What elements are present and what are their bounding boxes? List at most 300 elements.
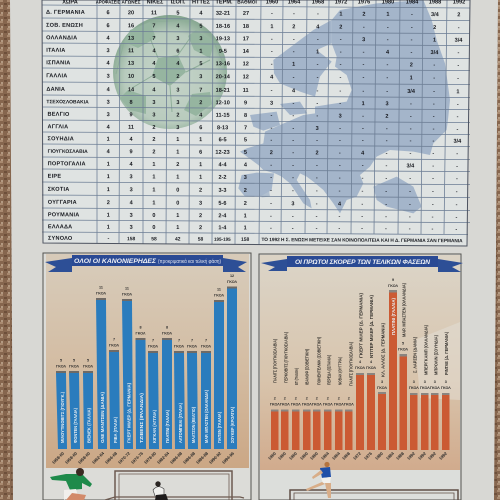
row: Netherlands: 4 [107, 36, 110, 42]
bar: 3 goals: ΜΠΡΟΛΙΝ (ΣΟΥΗΔΙΑ) [434, 335, 438, 375]
bar: 5 goals: ΜΑΡ. ΜΠΑΣΤΕΝ (ΟΛΛΑΝΔΙΑ) [402, 283, 406, 337]
bar: 7 goals: 7 [178, 338, 180, 342]
row: Scotland: - [292, 188, 294, 194]
row: Netherlands: - [271, 37, 273, 43]
row: Denmark: 4 [152, 87, 156, 93]
row: Scotland: 1 [107, 187, 110, 193]
row: Ireland: ΕΙΡΕ [48, 174, 61, 180]
row: Ireland: - [432, 176, 434, 182]
row: England: 3 [316, 126, 319, 132]
bar: 3 goals: ΓΚΟΛ [409, 386, 419, 390]
row: Netherlands: 7 [152, 36, 156, 42]
row: Romania: 0 [152, 213, 155, 219]
row: West Germany: 2 [362, 12, 365, 18]
row: Belgium: - [410, 114, 412, 120]
bar: 4 goals: ΓΚΕΡΤ ΜΙΛΕΡ (Δ. ΓΕΡΜΑΝΙΑ) [358, 293, 364, 358]
row: Romania: 3 [130, 213, 133, 219]
row: Spain: - [271, 62, 273, 68]
row: West Germany: 5 [176, 11, 180, 17]
row: Scotland [48, 187, 458, 195]
bar: 5 goals: ΓΚΟΛ [69, 364, 80, 368]
row: Ireland: 1 [107, 174, 110, 180]
row: Ireland: - [292, 175, 294, 181]
bar: 2 goals: ΓΚΟΛ [334, 402, 344, 406]
row: Portugal: 1 [152, 162, 156, 168]
bar: 2 goals [299, 349, 312, 461]
row: Italy: 6 [176, 49, 179, 55]
row: West Germany: Δ. ΓΕΡΜΑΝΙΑ [46, 10, 85, 16]
row: Ireland: - [316, 175, 318, 181]
row: Greece: - [455, 227, 457, 233]
row: Italy: 11 [128, 48, 134, 54]
row: Portugal: 3/4 [406, 163, 415, 169]
row: Czechoslovakia: 3 [176, 100, 179, 106]
row: Hungary: 4 [338, 201, 342, 208]
row: Portugal: - [362, 163, 364, 169]
row: Soviet Union: 18-16 [216, 24, 230, 30]
bar: 3 goals: ΜΠΕΡΓΚΑΜΠ (ΟΛΛΑΝΔΙΑ) [424, 325, 428, 375]
row: Netherlands: - [317, 37, 319, 43]
row: Spain: - [317, 62, 319, 68]
row: France: - [340, 75, 342, 81]
row: Sweden: - [292, 138, 294, 144]
row: Belgium: 4 [199, 113, 203, 119]
row: Hungary: - [270, 201, 272, 207]
row: Spain [46, 60, 459, 69]
row: England: - [457, 127, 459, 133]
row: Italy: 1 [199, 49, 202, 55]
row: Spain: - [433, 63, 435, 69]
row: Soviet Union: 16 [128, 23, 134, 29]
row: West Germany: 20 [128, 10, 134, 16]
bar: 11 goals: ΓΚΟΛ [96, 292, 107, 296]
row: Sweden: ΣΟΥΗΔΙΑ [48, 136, 74, 142]
row: Hungary: 3 [199, 201, 202, 207]
row: West Germany: 4 [199, 11, 203, 17]
bar: 7 goals: ΓΚΟΛ [109, 344, 120, 348]
row: Sweden [48, 136, 462, 145]
row: France [46, 73, 459, 82]
bar: 5 goals: 1958-60 [64, 450, 79, 465]
row: France: - [362, 75, 364, 81]
row: Belgium [47, 112, 459, 120]
row: England: - [386, 126, 388, 132]
row: Sweden: - [386, 138, 388, 144]
row: Hungary: 0 [176, 200, 179, 207]
row: Hungary [48, 200, 458, 208]
row: Greece: - [292, 226, 294, 232]
table: qualifying results by country [42, 0, 470, 246]
row: France: 5 [152, 74, 156, 80]
bar: 2 goals [331, 357, 344, 461]
row: Hungary: 2 [107, 200, 110, 206]
row: Romania [48, 212, 457, 221]
row: England: 11 [128, 125, 134, 131]
row: Sweden: 2 [152, 137, 156, 143]
row: Hungary: 1 [152, 200, 156, 206]
bar: 2 goals: 2 [306, 396, 308, 400]
row: Romania: - [361, 214, 363, 220]
row: Yugoslavia: - [410, 151, 412, 157]
row: total and note: 58 [198, 237, 204, 243]
bar: 4 goals: 4 [359, 360, 362, 364]
row: Hungary: - [385, 202, 387, 208]
bar: 5 goals: 1958-60 [77, 450, 92, 465]
row: Spain: - [363, 62, 365, 68]
bar: 5 goals: ΜΙΛΟΥΤΙΝΟΒΙΤΣ (ΓΙΟΥΓΚ.) [60, 392, 65, 443]
bar: 12 goals: 12 [230, 274, 234, 278]
row: Yugoslavia: - [432, 151, 434, 157]
bar: 7 goals: ΡΙΒΑ (ΙΤΑΛΙΑ) [113, 417, 118, 443]
row: England: - [292, 126, 294, 132]
bar: 2 goals: ΓΙΑΛΙΤΣ (ΓΙΟΥΓΚΟΣΛΑΒΙΑ) [348, 342, 354, 386]
bar: 2 goals: ΝΟΒΑΚ (ΟΥΓΓΡΙΑ) [338, 357, 342, 385]
row: Czechoslovakia: 3 [270, 101, 273, 107]
row: total and note [48, 236, 463, 244]
bar: 7 goals: 1986-88 [195, 450, 210, 465]
row: Scotland: - [432, 189, 434, 195]
row: Greece: - [316, 226, 318, 232]
bar: 3 goals: 1992 [406, 450, 416, 461]
row: Portugal [48, 161, 458, 170]
row: France: ΓΑΛΛΙΑ [46, 73, 68, 79]
bar: 2 goals: ΓΚΟΛ [302, 402, 312, 406]
bar: 2 goals: ΠΕΡΕΔΑ (ΙΣΠΑΝΙΑ) [326, 355, 332, 385]
row: Soviet Union: - [458, 25, 460, 31]
table header row: ΒΑΘΜΟΙ [237, 0, 257, 5]
row: Scotland: 1 [152, 187, 155, 193]
row: France: 20-14 [216, 74, 231, 80]
row: Czechoslovakia: 1 [362, 101, 365, 107]
bar: 7 goals [143, 338, 159, 465]
row: Yugoslavia: 9 [130, 149, 133, 155]
row: England: - [433, 127, 435, 133]
bar: 5 goals: 5 [402, 342, 404, 346]
row: Sweden: - [316, 138, 318, 144]
row: Denmark: 4 [107, 87, 111, 93]
row: Romania: ΡΟΥΜΑΝΙΑ [48, 212, 80, 218]
bar: 5 goals: ΓΚΟΛ [83, 364, 94, 368]
row: Spain: 13 [128, 61, 134, 67]
bar: 2 goals: 1960 [288, 450, 298, 461]
row: West Germany: 6 [106, 10, 110, 16]
row: Czechoslovakia: - [457, 102, 459, 108]
row: Spain: 1 [292, 62, 295, 68]
bar: 11 goals [208, 288, 225, 465]
bar: 2 goals [309, 337, 322, 461]
row: Hungary: 4 [130, 200, 134, 206]
row: Yugoslavia: - [292, 150, 294, 156]
bar: 3 goals: 1980 [374, 450, 384, 461]
row: Italy: 14 [243, 49, 250, 55]
row: Scotland: 3-3 [218, 188, 226, 194]
bar: 11 goals: 1970-72 [117, 450, 132, 465]
bar: 2 goals: 2 [284, 396, 286, 400]
row: Spain: 13-16 [216, 61, 230, 67]
row: France: - [457, 76, 459, 82]
row: Spain: - [340, 62, 342, 68]
bar: 2 goals [288, 368, 301, 461]
row: Hungary: 2 [244, 201, 247, 207]
bar: 8 goals [130, 326, 146, 465]
bar: 3 goals: 3 [413, 380, 415, 384]
row: Czechoslovakia: - [433, 102, 435, 108]
row: Sweden: - [410, 138, 412, 144]
row: total and note: 58 [151, 236, 157, 242]
bar: 3 goals: 1992 [438, 450, 448, 461]
bar: 7 goals: 7 [113, 338, 115, 342]
row: Netherlands: 19-13 [216, 36, 230, 42]
goal illustration right [290, 490, 458, 500]
banner: left heading: (προκριματικά και τελική φάση) [158, 258, 221, 265]
row: Portugal: - [339, 163, 341, 169]
bar: 4 goals: ΝΤΙΤΕΡ ΜΙΛΕΡ (Δ. ΓΕΡΜΑΝΙΑ) [369, 295, 374, 358]
row: Sweden: - [270, 138, 272, 144]
row: Portugal: 4 [130, 162, 134, 168]
row: Czechoslovakia: - [339, 101, 341, 107]
row: Romania: 2-4 [218, 213, 227, 219]
bar: 3 goals [417, 325, 430, 461]
row: France: 4 [270, 75, 274, 81]
bar: 3 goals [406, 337, 419, 461]
row: Romania: - [432, 215, 434, 221]
row: Yugoslavia: ΓΙΟΥΓΚΟΣΛΑΒΙΑ [48, 149, 88, 155]
row: Hungary: 5-6 [218, 201, 226, 207]
row: Greece: 1 [107, 225, 110, 231]
row: Italy: - [293, 49, 295, 55]
row: Yugoslavia [48, 149, 458, 157]
row: France: 3 [107, 74, 110, 80]
bar: 5 goals [395, 283, 409, 461]
row: Denmark: 3/4 [407, 89, 416, 95]
row: Scotland: - [361, 189, 363, 195]
row: Romania: - [409, 214, 411, 220]
row: Romania: - [455, 215, 457, 221]
bar: 2 goals: 2 [327, 396, 329, 400]
row: Scotland: 2 [199, 188, 202, 194]
panel: all-time qualifying top scorers [43, 253, 251, 500]
soccer ball watermark [113, 15, 227, 129]
bar: 7 goals: ΜΑΡ. ΜΠΑΣΤΕΝ (ΟΛΛΑΝΔΙΑ) [204, 390, 209, 443]
row: Belgium: - [292, 113, 294, 119]
row: Portugal: - [386, 163, 388, 169]
row: Spain: - [457, 63, 459, 69]
row: Greece: - [361, 226, 363, 232]
row: Romania: - [385, 214, 387, 220]
row: Soviet Union [46, 23, 460, 31]
row: France: - [386, 75, 388, 81]
row: total and note: 158 [127, 236, 136, 242]
row: Soviet Union: 4 [176, 24, 180, 30]
bar: 11 goals: ΓΚΟΛ [122, 292, 133, 296]
row: Belgium: ΒΕΛΓΙΟ [47, 112, 70, 118]
row: Portugal: 1 [107, 162, 110, 168]
bar: 2 goals: ΙΒΑΝΟΦ (ΣΟΒΙΕΤΙΚΗ) [304, 349, 310, 385]
bar: 3 goals: 3 [445, 380, 447, 384]
row: Yugoslavia: 4 [107, 149, 111, 155]
row: West Germany: 1 [386, 12, 389, 18]
bar: 8 goals: ΠΛΑΤΙΝΙ (ΓΑΛΛΙΑ) [165, 410, 170, 443]
bar: 2 goals: 1960 [267, 450, 277, 461]
bar: 9 goals: 1984 [385, 450, 395, 461]
bar: 2 goals: ΓΚΟΛ [323, 402, 333, 406]
row: Denmark: 11 [243, 88, 249, 94]
row: West Germany [46, 10, 460, 18]
row: West Germany: 2 [457, 12, 460, 18]
bar: 3 goals: 3 [434, 380, 436, 384]
bar: 7 goals: 1966-68 [104, 450, 119, 465]
bar: 3 goals: ΓΚΟΛ [377, 386, 388, 390]
row: West Germany: 1 [339, 11, 342, 18]
row: Ireland: - [385, 176, 387, 182]
row: Denmark: 14 [128, 87, 135, 93]
row: Hungary: - [316, 201, 318, 207]
row: Greece [48, 224, 457, 233]
row: Denmark: - [433, 89, 435, 95]
bar: 7 goals: ΑΛΤΟΜΠΕΛΙ (ΙΤΑΛΙΑ) [178, 403, 183, 443]
row: Netherlands: ΟΛΛΑΝΔΙΑ [46, 35, 77, 41]
bar: 11 goals: ΓΚΕΡΤ ΜΙΛΕΡ (Δ. ΓΕΡΜΑΝΙΑ) [126, 383, 132, 443]
row: Denmark: ΔΑΝΙΑ [46, 87, 65, 93]
row: Yugoslavia: 6 [199, 150, 202, 156]
row: West Germany: - [317, 11, 319, 17]
row: Romania: - [338, 214, 340, 220]
row: Netherlands: - [340, 37, 342, 43]
row: Belgium: - [433, 114, 435, 120]
row: Denmark: - [316, 88, 318, 94]
bar: 11 goals: ΟΛΕ ΜΑΝΤΣΕΝ (ΔΑΝΙΑ) [100, 392, 105, 443]
row: Italy: 9-5 [219, 49, 227, 55]
row: Netherlands: - [411, 37, 413, 43]
row: Portugal: ΠΟΡΤΟΓΑΛΙΑ [48, 161, 86, 167]
row: Czechoslovakia: 9 [244, 100, 247, 106]
bar: 2 goals: 2 [274, 396, 276, 400]
row: Denmark: - [362, 89, 364, 95]
bar: 11 goals: ΠΑΠΕΝ (ΓΑΛΛΙΑ) [217, 412, 222, 443]
row: Scotland: ΣΚΟΤΙΑ [48, 187, 70, 193]
row: Denmark: - [271, 88, 273, 94]
row: Sweden: 1 [199, 137, 202, 143]
row: Belgium: 3 [152, 112, 156, 118]
row: West Germany: 3/4 [431, 12, 440, 18]
row: Italy: - [411, 50, 413, 56]
row: Netherlands: 3/4 [455, 38, 463, 44]
row: Portugal: - [432, 164, 434, 170]
row: total and note: - [107, 236, 109, 242]
row: England: 3 [176, 125, 179, 131]
row: Spain: 5 [199, 61, 202, 67]
bar: 2 goals: ΓΚΟΛ [291, 402, 301, 406]
bar: 5 goals [64, 358, 80, 465]
bar: 3 goals: Σ. ΛΑΡΣΕΝ (ΔΑΝΙΑ) [412, 337, 418, 373]
bar: 11 goals: 11 [125, 286, 129, 290]
row: Soviet Union: 1 [270, 24, 273, 30]
row: Soviet Union: 4 [316, 24, 320, 30]
bar: 7 goals: 7 [205, 338, 207, 342]
bar: 7 goals [195, 338, 212, 465]
banner: right heading [261, 256, 463, 272]
bar: 2 goals: ΓΕΡΚΟΒΙΤΣ (ΓΙΟΥΓΚΟΣΛΑΒΙΑ) [284, 332, 288, 383]
row: Netherlands: 17 [243, 36, 249, 42]
bar: 4 goals: 1972 [352, 450, 362, 461]
row: Belgium: - [457, 114, 459, 120]
row: Netherlands: 3 [176, 36, 180, 42]
bar: 3 goals [374, 323, 388, 461]
row: Soviet Union: 7 [152, 23, 156, 29]
row: Spain: ΙΣΠΑΝΙΑ [46, 60, 71, 66]
row: Belgium: 3 [107, 112, 110, 118]
row: Romania: 1 [107, 213, 110, 219]
row: Italy: 1 [316, 49, 319, 55]
row: Sweden: - [339, 138, 341, 144]
row: Scotland: 2 [244, 188, 247, 194]
bar: 5 goals: 1988 [395, 450, 405, 461]
row: Portugal: 2 [176, 162, 179, 168]
panel: top scorers of final tournaments [259, 254, 463, 500]
row: Yugoslavia: 12-23 [215, 150, 230, 156]
row: France: 3 [199, 74, 202, 80]
row: England: - [339, 126, 341, 132]
row: total and note: 42 [175, 236, 181, 243]
row: Belgium: 2 [176, 112, 179, 119]
bar: 7 goals: 1986-88 [182, 450, 197, 465]
row: Yugoslavia: - [456, 151, 458, 157]
bar: 7 goals [182, 338, 198, 465]
row: Denmark: - [386, 89, 388, 95]
row: Italy: - [457, 50, 459, 56]
bar: 5 goals [51, 358, 67, 465]
row: Sweden: 1 [107, 137, 110, 143]
row: Czechoslovakia: 12-10 [216, 100, 230, 106]
row: Netherlands: - [293, 37, 295, 43]
bar: 2 goals [320, 355, 333, 461]
bar: 9 goals: ΠΛΑΤΙΝΙ (ΓΑΛΛΙΑ) [391, 298, 396, 335]
bar: 11 goals: 1962-64 [91, 450, 106, 465]
bar: 11 goals: 11 [217, 288, 221, 292]
row: Sweden: 4 [130, 137, 134, 143]
row: Greece: 2 [199, 225, 202, 231]
row: Czechoslovakia: 2 [199, 100, 202, 106]
icon: player in blue [306, 462, 331, 498]
bar: 11 goals [117, 286, 133, 465]
row: Greece: - [385, 226, 387, 232]
row: West Germany: 27 [243, 11, 249, 17]
row: total and note: 158 [241, 237, 249, 243]
row: Hungary: - [456, 202, 458, 208]
row: Greece: - [432, 227, 434, 233]
bar: 5 goals: ΓΚΟΛ [398, 348, 409, 352]
bar: 5 goals: 1958-60 [51, 450, 66, 465]
row: Sweden: 3/4 [453, 139, 462, 145]
row: Spain: 4 [176, 61, 180, 67]
row: West Germany: - [411, 12, 413, 18]
row: Soviet Union: 2 [292, 24, 295, 30]
row: Hungary: - [432, 202, 434, 208]
row: Scotland: 3 [130, 187, 133, 193]
row: Portugal: 4 [244, 162, 248, 168]
row: Sweden: - [433, 139, 435, 145]
bar: 7 goals: ΓΚΟΛ [187, 344, 198, 348]
bar: 7 goals: 1986-88 [169, 450, 184, 465]
bar: 7 goals: ΓΚΟΛ [174, 344, 185, 348]
row: Soviet Union: ΣΟΒ. ΕΝΩΣΗ [46, 23, 83, 29]
row: Italy: - [340, 49, 342, 56]
row: England: 7 [244, 125, 247, 131]
row: Soviet Union: 2 [339, 24, 342, 31]
row: Spain: 4 [152, 61, 156, 67]
map of Europe [238, 0, 450, 213]
bar: 2 goals [277, 332, 290, 461]
